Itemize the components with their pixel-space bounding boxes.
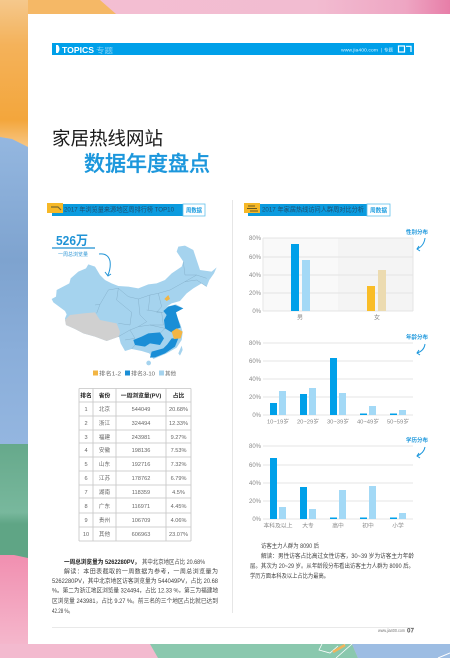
ranking table: 2 (84, 421, 88, 427)
callout: 526万 weekly views: 一周总浏览量 (58, 251, 88, 258)
header bar: 专题 (384, 46, 393, 54)
background: left strip (0, 0, 28, 658)
ranking table: 山东 (99, 460, 110, 468)
header bar (52, 43, 414, 55)
annotation: education: 学历分布 (406, 436, 428, 444)
ranking table: 178762 (132, 476, 150, 482)
ranking table: 省份 (99, 392, 110, 400)
header bar: www.jia400.com (341, 48, 378, 52)
ranking table: 4.06% (171, 518, 186, 524)
map legend: 其他 (165, 370, 176, 378)
ranking table: 1 (84, 407, 88, 413)
ranking table: 湖南 (99, 488, 110, 496)
chart: age: 20% (249, 395, 262, 401)
title: 家居热线网站 (52, 128, 163, 149)
ranking table: 3 (84, 435, 88, 441)
background: bottom strip (0, 644, 450, 658)
ranking table: 4.5% (172, 490, 185, 496)
ranking table: 浙江 (99, 419, 110, 427)
annotation: gender (406, 228, 428, 251)
ranking table: 106709 (132, 518, 150, 524)
ranking table: 排名 (80, 392, 92, 400)
text block: right commentary (250, 542, 414, 580)
section heading: right: 2017 年家居热线访问人群周对比分析 (262, 204, 364, 214)
chart: gender (249, 236, 413, 322)
text block: right commentary: 层。其次为 20~29 岁。从年龄段分布看出访客主力人群为 8090 后。 (250, 562, 414, 570)
map of China (52, 246, 217, 365)
ranking table: 9 (84, 518, 88, 524)
ranking table: 198136 (132, 448, 150, 454)
map legend: 排名3-10 (131, 370, 155, 378)
arrow: callout to map (99, 254, 111, 276)
ranking table: 12.33% (169, 421, 188, 427)
chart: age: 30~39岁 (327, 418, 349, 426)
ranking table: 10 (83, 532, 89, 538)
chart: age: 40~49岁 (357, 418, 379, 426)
ranking table: 其他 (99, 530, 110, 538)
chart: age: 60% (249, 359, 262, 365)
annotation: age: 年龄分布 (406, 333, 428, 341)
ranking table: 江苏 (99, 474, 110, 482)
ranking table: 7.32% (171, 462, 186, 468)
ranking table: 9.27% (171, 435, 186, 441)
ranking table: 606963 (132, 532, 150, 538)
callout: 526万 weekly views (52, 233, 95, 258)
chart: education: 20% (249, 499, 262, 505)
ranking table: 23.07% (169, 532, 188, 538)
chart: education: 本科及以上 (264, 522, 293, 530)
section heading: left (47, 203, 205, 216)
section heading: left: 周数据 (186, 206, 202, 214)
chart: education: 小学 (392, 522, 404, 530)
header bar: | (381, 48, 382, 52)
chart: education: 60% (249, 463, 262, 469)
text block: left commentary: 解读：本田表截取的一周数据为参考，一周总浏览量为 (64, 568, 218, 576)
ranking table: 118359 (132, 490, 150, 496)
chart: education: 40% (249, 481, 262, 487)
ranking table: 116971 (132, 504, 150, 510)
chart: age: 50~59岁 (387, 418, 409, 426)
ranking table: 192716 (132, 462, 150, 468)
text block: left commentary: %。第二为浙江地区浏览量 324494，占比 12.33 %，第三为福建地 (52, 586, 218, 594)
ranking table: 一周浏览量(PV) (121, 392, 161, 400)
text block: right commentary: 解读：男性访客占比高过女性访客，30~39 岁为访客主力年龄 (261, 552, 414, 560)
section heading: right (244, 203, 390, 216)
ranking table: 4.45% (171, 504, 186, 510)
callout: 526万 weekly views: 526万 (56, 233, 88, 248)
ranking table: 5 (84, 462, 88, 468)
chart: education: 0% (252, 517, 262, 523)
chart: education: 初中 (362, 522, 374, 530)
title (52, 128, 210, 176)
chart: education: 80% (249, 444, 262, 450)
footer: 07 (407, 628, 415, 634)
ranking table: 6 (84, 476, 88, 482)
header bar: 专题 (96, 45, 114, 55)
section heading: left: 2017 年浏览量来源地区周排行榜 TOP10 (64, 204, 174, 214)
chart: age: 80% (249, 341, 262, 347)
text block: left commentary: 区浏览量 243981，占比 9.27 %。前三名的三个地区占比就已达到 (52, 597, 218, 605)
annotation: gender: 性别分布 (406, 228, 428, 236)
ranking table: 243981 (132, 435, 150, 441)
ranking table: 广东 (99, 502, 110, 510)
chart: gender: 男 (297, 314, 303, 322)
chart: gender: 60% (249, 255, 262, 261)
ranking table (79, 388, 191, 541)
chart: age: 40% (249, 377, 262, 383)
header bar: TOPICS (62, 45, 94, 55)
chart: gender: 40% (249, 273, 262, 279)
ranking table: 7.53% (171, 448, 186, 454)
column divider (232, 200, 234, 613)
text block: right commentary: 学历方面本科及以上占比为最高。 (250, 572, 329, 580)
ranking table: 324494 (132, 421, 150, 427)
annotation: education (406, 436, 428, 458)
text block: left commentary: 一周总浏览量为 5262280PV， (64, 558, 140, 566)
ranking table: 544049 (132, 407, 150, 413)
chart: education (249, 444, 413, 530)
ranking table: 6.79% (171, 476, 186, 482)
ranking table: 20.68% (169, 407, 188, 413)
text block: right commentary: 访客主力人群为 8090 后 (261, 542, 319, 550)
text block: left commentary: 其中北京地区占比 20.68% (142, 558, 206, 566)
ranking table: 安徽 (99, 446, 110, 454)
chart: education: 高中 (332, 522, 344, 530)
ranking table: 7 (84, 490, 88, 496)
text block: left commentary: 5262280PV，其中北京地区访客浏览量为 544049PV，占比 20.68 (52, 577, 219, 585)
chart: gender: 20% (249, 291, 262, 297)
chart: age: 10~19岁 (267, 418, 289, 426)
annotation: age (406, 333, 428, 355)
ranking table: 北京 (99, 405, 110, 413)
background: top strip (0, 0, 450, 14)
text block: left commentary: 42.28 %。 (52, 609, 73, 615)
text block: left commentary (52, 558, 219, 615)
chart: gender: 0% (252, 309, 262, 315)
map legend: 排名1-2 (99, 370, 121, 378)
ranking table: 福建 (99, 433, 110, 441)
ranking table: 8 (84, 504, 88, 510)
chart: education: 大专 (302, 522, 314, 530)
ranking table: 贵州 (99, 516, 110, 524)
ranking table: 4 (84, 448, 88, 454)
title: 数据年度盘点 (84, 153, 210, 176)
footer (52, 628, 415, 634)
chart: gender: 80% (249, 236, 262, 242)
chart: age: 0% (252, 413, 262, 419)
chart: age (249, 341, 413, 426)
chart: gender: 女 (374, 314, 380, 322)
map legend (93, 370, 176, 378)
chart: age: 20~29岁 (297, 418, 319, 426)
ranking table: 占比 (173, 392, 184, 400)
section heading: right: 周数据 (370, 206, 387, 214)
footer: www.jia400.com (378, 628, 405, 633)
